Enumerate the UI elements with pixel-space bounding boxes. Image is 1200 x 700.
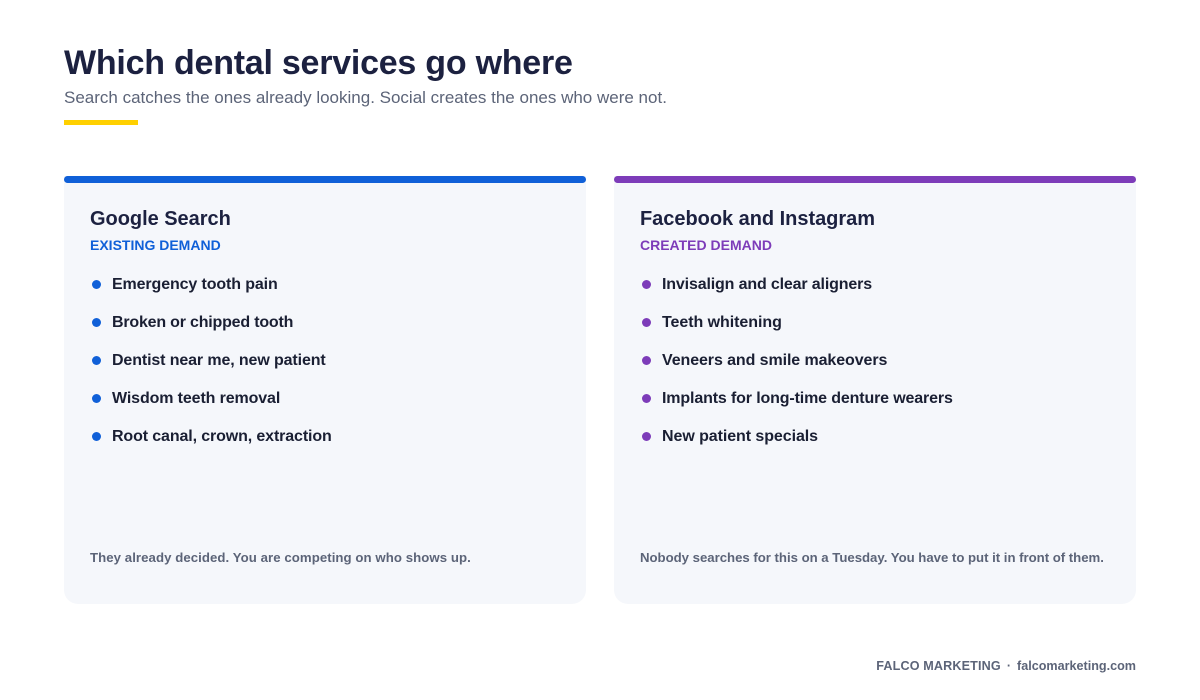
subtitle: Search catches the ones already looking. Social creates the ones who were not.: [64, 88, 667, 107]
list item: root canal: Root canal, crown, extraction: [112, 428, 332, 445]
footer: FALCO MARKETING · falcomarketing.com: [876, 659, 1136, 673]
list item: implants: Implants for long-time denture wearers: [662, 390, 953, 407]
list item: dentist near me: Dentist near me, new patient: [112, 352, 326, 369]
panel: Facebook and Instagram: [614, 176, 1136, 604]
tag: existing demand: EXISTING DEMAND: [90, 237, 221, 253]
panel heading: Facebook and Instagram: Facebook and Instagram: [640, 208, 875, 230]
list item: emergency tooth pain: Emergency tooth pain: [112, 276, 278, 293]
yellow accent rule: [64, 120, 138, 125]
panel top bar: purple: [614, 176, 1136, 183]
panel note: social: Nobody searches for this on a Tuesday. You have to put it in front of them.: [640, 550, 1104, 564]
list item: broken tooth: Broken or chipped tooth: [112, 314, 293, 331]
panel: Google Search: [64, 176, 586, 604]
list item: Invisalign: Invisalign and clear aligners: [662, 276, 872, 293]
list item: veneers: Veneers and smile makeovers: [662, 352, 887, 369]
panel heading: Google Search: Google Search: [90, 208, 231, 230]
list item: whitening: Teeth whitening: [662, 314, 782, 331]
list item: wisdom teeth: Wisdom teeth removal: [112, 390, 280, 407]
title: Which dental services go where: [64, 44, 573, 82]
panel note: Google: They already decided. You are competing on who shows up.: [90, 550, 471, 564]
panel top bar: blue: [64, 176, 586, 183]
tag: created demand: CREATED DEMAND: [640, 237, 772, 253]
list item: specials: New patient specials: [662, 428, 818, 445]
